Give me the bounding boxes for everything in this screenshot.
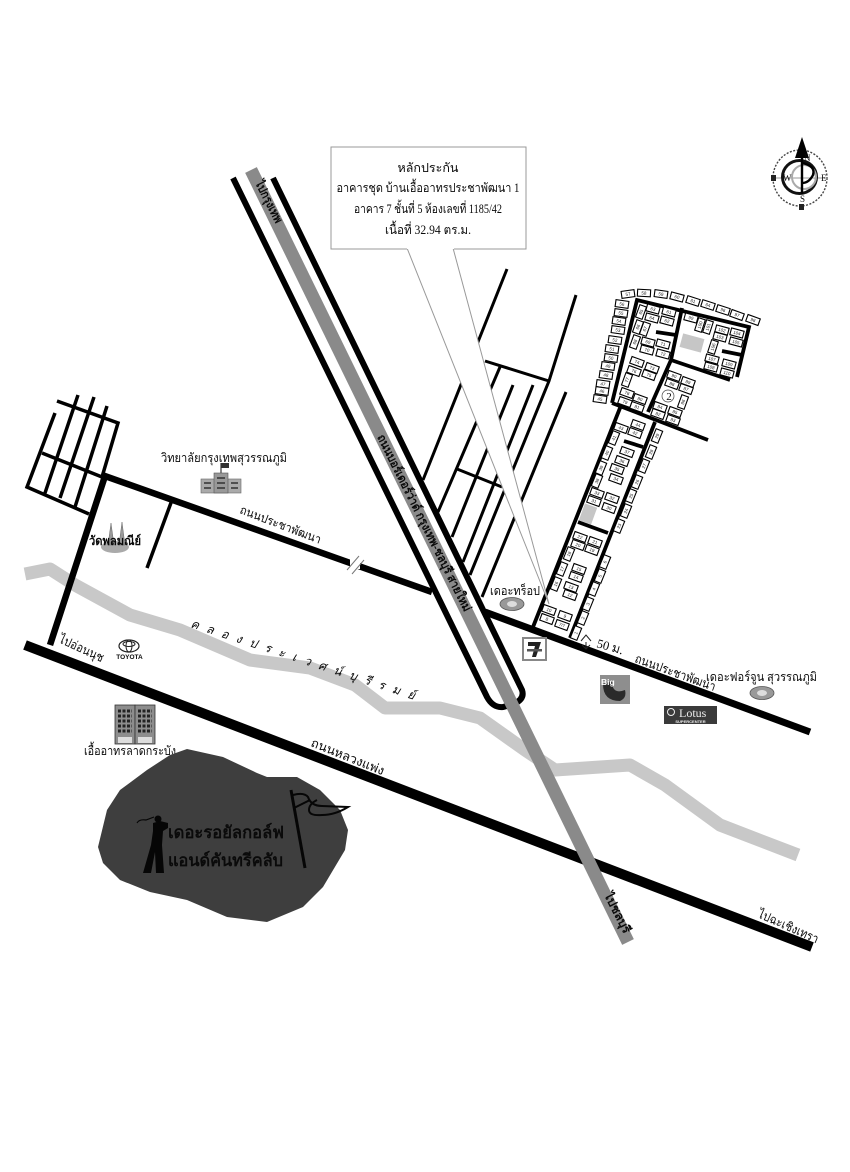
plots: west column: 48 <box>603 372 609 378</box>
plots: west column: 55 <box>618 310 624 316</box>
plots: north-east block: 100 <box>697 320 704 329</box>
plots: strip upper: 29 <box>654 432 661 439</box>
icon: Lotus: Lotus <box>679 706 707 720</box>
plots: strip lower: 10 <box>546 607 553 613</box>
housing estate plots <box>540 289 760 640</box>
label: golf club: เดอะรอยัลกอล์ฟ <box>168 822 284 842</box>
plots: strip lower: 9 <box>563 613 567 619</box>
plots: north-west block: 81 <box>634 404 641 410</box>
plots: strip lower: 19 <box>589 547 596 553</box>
plots: north row <box>621 289 760 326</box>
compass: W <box>783 173 792 183</box>
plots: strip lower: 14 <box>573 574 580 580</box>
plots: centre block: 83 <box>670 417 677 423</box>
plots: strip lower: 7/7 <box>558 622 566 629</box>
plots: north-west block: 68 <box>632 338 638 345</box>
callout text: เนื้อที่ 32.94 ตร.ม. <box>385 220 471 237</box>
plots: strip lower: 21 <box>592 539 599 545</box>
plots: strip upper: 40 <box>604 449 611 456</box>
icon: temple <box>101 522 129 553</box>
plots: west column: 45 <box>597 396 603 402</box>
golf course area <box>98 749 348 922</box>
plots: north row: 64 <box>705 302 712 308</box>
callout text: หลักประกัน <box>398 161 459 175</box>
plots: west column: 49 <box>605 363 611 369</box>
plots: north-west block: 77 <box>624 376 630 383</box>
side street grid: west <box>27 395 172 568</box>
icon: Toyota logo: TOYOTA <box>116 654 143 661</box>
plots: strip lower: 3 <box>585 601 591 606</box>
plots: north-east block: 103 <box>716 334 725 341</box>
plots: west column: 56 <box>619 301 625 307</box>
label: temple: วัดพลมณีย์ <box>89 533 141 548</box>
label: The Fortune: เดอะฟอร์จูน สุวรรณภูมิ <box>706 670 817 685</box>
plots: strip lower: 5 <box>597 573 603 578</box>
icon: apartment buildings <box>115 705 155 744</box>
estate marker 2: 2 <box>666 391 672 403</box>
plots: strip upper: 38 <box>594 477 601 484</box>
plots: north row: 57 <box>625 291 631 297</box>
plots: strip lower: 18 <box>566 550 573 557</box>
road break mark <box>347 556 364 574</box>
motorway carriageways <box>233 178 523 707</box>
label: The Tropical: เดอะทร็อป <box>490 583 540 598</box>
icon: The Fortune logo <box>750 686 774 700</box>
plots: strip upper: 39 <box>598 464 605 471</box>
plots: strip upper: 42 <box>632 430 639 436</box>
plots: strip lower: 1 <box>573 630 579 635</box>
plots: north-west block: 63 <box>650 306 657 312</box>
plots: north-west block: 75 <box>646 372 653 378</box>
plots: strip lower: 2 <box>580 615 586 620</box>
plots: centre block: 85 <box>672 409 679 415</box>
housing estate roads <box>533 300 749 638</box>
plots: strip upper: 27 <box>641 462 648 469</box>
plots: north row: 97 <box>734 312 741 318</box>
callout <box>331 147 549 604</box>
label: 50 m: 50 ม. <box>595 636 625 657</box>
plots: centre block: 90 <box>671 373 678 379</box>
compass <box>771 137 828 210</box>
plots: north-west block: 70 <box>644 347 651 353</box>
plots: strip upper: 32 <box>609 495 616 501</box>
plots: strip upper: 23 <box>616 522 623 529</box>
plots: strip upper: 41 <box>611 434 618 441</box>
plots: west column: 47 <box>600 381 606 387</box>
icon: Big C: Big <box>601 677 615 687</box>
callout text <box>336 161 520 237</box>
road: Prachaphatthana east <box>485 612 810 732</box>
road: Prachaphatthana west and link <box>50 476 432 645</box>
plots: north-west block <box>618 304 676 413</box>
plots: north-west block: 66 <box>635 323 641 330</box>
plots: north-east block: 99 <box>688 315 695 321</box>
plots: strip upper: 34 <box>613 476 620 482</box>
callout text: อาคาร 7 ชั้นที่ 5 ห้องเลขที่ 1185/42 <box>354 199 502 216</box>
label: Luang Phaeng road: ถนนหลวงแพ่ง <box>309 736 386 778</box>
callout text: อาคารชุด บ้านเอื้ออาทรประชาพัฒนา 1 <box>336 178 520 196</box>
plots: strip upper: 44 <box>635 422 642 428</box>
label: to Chonburi: ไปชลบุรี <box>600 888 635 937</box>
plots: north-east block: 106 <box>710 342 717 351</box>
callout box <box>331 147 526 249</box>
plots: north-east block: 109 <box>725 361 734 368</box>
plots: north-east block: 101 <box>705 322 712 331</box>
plots: north-west block: 64 <box>649 315 656 321</box>
plots: strip lower: 15 <box>576 566 583 572</box>
label: Eua-Arthorn Lat Krabang: เอื้ออาทรลาดกระบัง <box>84 741 176 758</box>
plots: strip lower: 22 <box>577 534 584 540</box>
plots: north row: 96 <box>720 307 727 313</box>
plots: strip lower: 4 <box>591 586 597 591</box>
plots: north-east block: 108 <box>707 364 716 371</box>
plots: north-west block: 79 <box>622 399 629 405</box>
side street grid: centre <box>423 269 576 597</box>
plots: strip lower: 20 <box>575 542 582 548</box>
plots: north-east block: 107 <box>708 356 717 363</box>
label: to On Nut: ไปอ่อนนุช <box>56 632 106 666</box>
plots: north row: 60 <box>674 294 681 300</box>
icon: Toyota logo <box>116 640 143 661</box>
label: Prachaphatthana east: ถนนประชาพัฒนา <box>633 652 718 694</box>
icon: The Tropical logo <box>500 598 524 610</box>
golf course <box>98 749 348 922</box>
icon: college <box>201 463 241 493</box>
plots: north-west block: 62 <box>664 318 671 324</box>
plots: north-east block: 105 <box>732 339 741 346</box>
plots: west column: 46 <box>599 388 605 394</box>
plots: north-east block <box>684 313 744 378</box>
plots: strip lower: 6 <box>602 559 608 564</box>
plots: west column: 53 <box>615 327 621 333</box>
plots: strip upper: 43 <box>618 425 625 431</box>
plots: strip upper: 35 <box>614 466 621 472</box>
icon: distance arrow <box>581 635 591 649</box>
plots: centre block: 89 <box>685 379 692 385</box>
plots: strip upper: 30 <box>606 505 613 511</box>
plots: strip lower: 13 <box>568 584 575 590</box>
plots: strip upper: 36 <box>619 458 626 464</box>
plots: strip lower: 8 <box>545 616 549 622</box>
plots: north-west block: 67 <box>642 325 648 332</box>
plots: strip lower: 17 <box>559 565 566 572</box>
plots: north-west block: 65 <box>638 308 644 315</box>
plots: west column: 51 <box>609 346 615 352</box>
plots: north-west block: 61 <box>666 309 673 315</box>
icon: Lotus: SUPERCENTER <box>675 719 706 724</box>
estate green areas <box>579 333 704 525</box>
plots: centre block: 88 <box>669 381 676 387</box>
plots: strip lower: 12 <box>567 592 574 598</box>
plots: west column <box>593 300 629 403</box>
plots: strip upper: 33 <box>594 490 601 496</box>
icon: flag <box>291 790 348 868</box>
plots: north row: 58 <box>641 290 647 296</box>
label: canal: ค ล อ ง ป ร ะ เ ว ศ น์ บุ รี ร ม ย์ <box>189 617 420 704</box>
plots: north-west block: 73 <box>649 365 656 371</box>
plots: north row: 98 <box>750 317 757 323</box>
plots: centre block: 86 <box>680 398 686 405</box>
plots: north-east block: 104 <box>733 330 742 337</box>
plots: north row: 61 <box>690 298 697 304</box>
plots: centre block: 82 <box>655 411 662 417</box>
compass: N <box>804 153 811 163</box>
plots: strip upper <box>587 419 663 533</box>
callout pointer <box>407 248 549 604</box>
plots: north-west block: 78 <box>624 390 631 396</box>
plots: strip lower: 16 <box>553 580 560 587</box>
canal <box>25 569 798 855</box>
road: Luang Phaeng <box>25 645 812 947</box>
plots: north-east block: 102 <box>718 327 727 334</box>
estate marker 2 <box>662 390 674 403</box>
plots: north-east block: 110 <box>723 370 732 377</box>
label: to Bangkok: ไปกรุงเทพ <box>251 176 287 226</box>
compass: E <box>821 173 827 183</box>
compass: S <box>800 194 805 204</box>
plots: west column: 52 <box>612 337 618 343</box>
icon: golfer <box>137 816 168 873</box>
plots: strip upper: 28 <box>648 448 655 455</box>
plots: strip upper: 37 <box>624 449 631 455</box>
plots: north-west block: 80 <box>637 396 644 402</box>
plots: north-west block: 76 <box>631 368 638 374</box>
plots: north-west block: 72 <box>660 351 667 357</box>
icon: Lotus <box>664 706 717 724</box>
label: Prachaphatthana west: ถนนประชาพัฒนา <box>238 503 323 547</box>
plots: west column: 54 <box>616 318 622 324</box>
label: motorway: ถนนบอร์เดอร์ว่าด์ กรุงเทพ-ชลบุรี สายใหม่ <box>373 432 475 614</box>
plots: north-west block: 69 <box>645 339 652 345</box>
plots: centre block: 84 <box>657 404 664 410</box>
plots: centre block <box>651 370 695 426</box>
plots: strip upper: 26 <box>634 478 641 485</box>
plots: strip upper: 31 <box>591 498 598 504</box>
label: college: วิทยาลัยกรุงเทพสุวรรณภูมิ <box>161 451 287 466</box>
plots: strip upper: 25 <box>628 492 635 499</box>
plots: west column: 50 <box>608 355 614 361</box>
plots: centre block: 87 <box>683 386 690 392</box>
label: to Chachoengsao: ไปฉะเชิงเทรา <box>755 907 821 946</box>
plots: strip lower <box>540 531 611 640</box>
icon: Big C <box>600 675 630 704</box>
motorway median <box>251 170 628 942</box>
plots: north-west block: 74 <box>634 359 641 365</box>
plots: strip upper: 24 <box>623 507 630 514</box>
icon: 7-Eleven <box>523 638 546 660</box>
label: golf club line 2: แอนด์คันทรีคลับ <box>168 850 283 870</box>
plots: north-west block: 71 <box>660 341 667 347</box>
plots: north row: 59 <box>658 291 664 297</box>
